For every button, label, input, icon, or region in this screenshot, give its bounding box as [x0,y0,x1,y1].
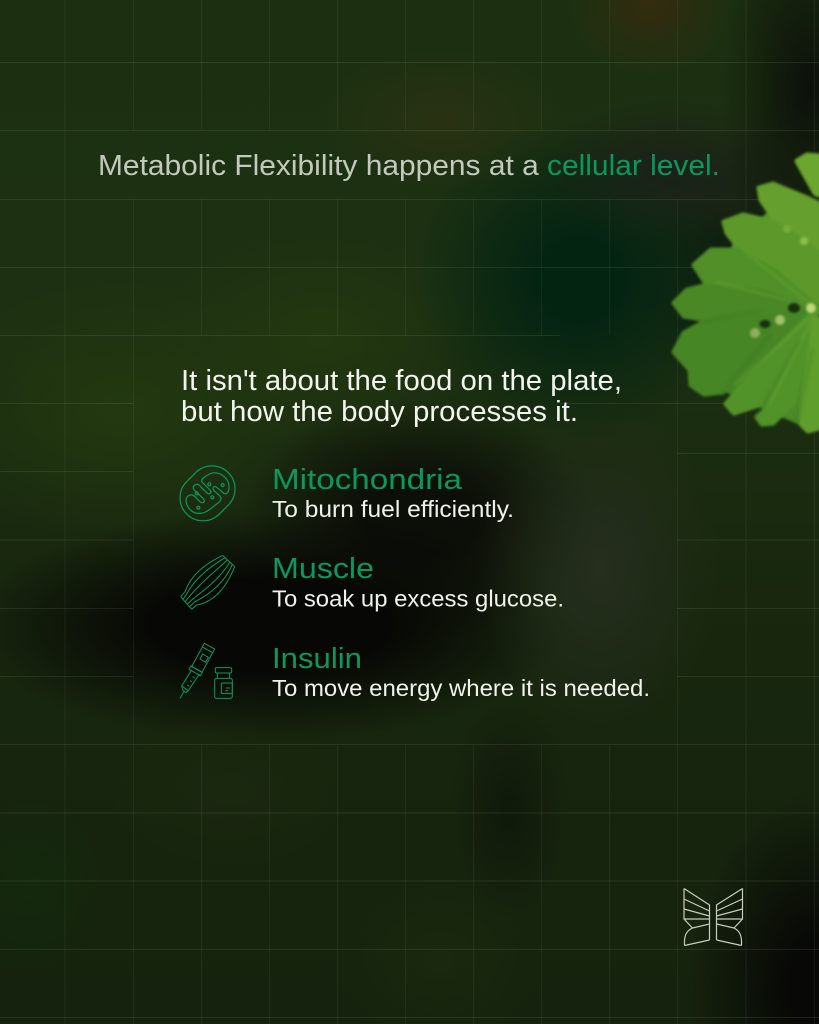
intro statement [181,365,622,428]
heading: Mitochondria: Mitochondria [272,464,463,496]
item: Insulin [180,643,650,701]
intro statement: It isn't about the food on the plate, [181,365,622,397]
description: Mitochondria: To burn fuel efficiently. [272,496,514,522]
description: Muscle: To soak up excess glucose. [272,586,564,612]
leaf veins [700,252,813,425]
icon: muscle [181,555,235,609]
icon: mitochondria [170,456,245,530]
leaf centre detail [750,225,816,338]
title: Metabolic Flexibility happens at a cellular level. [98,150,720,182]
heading: Muscle: Muscle [272,553,374,585]
item: Muscle [181,553,564,612]
logo: butterfly mark [684,888,742,946]
icon: insulin pen and vial [180,643,232,698]
item: Mitochondria [170,456,514,530]
description: Insulin: To move energy where it is needed. [272,675,650,701]
leaf photo [674,155,819,431]
heading: Insulin: Insulin [272,643,362,675]
intro statement: but how the body processes it. [181,396,578,428]
